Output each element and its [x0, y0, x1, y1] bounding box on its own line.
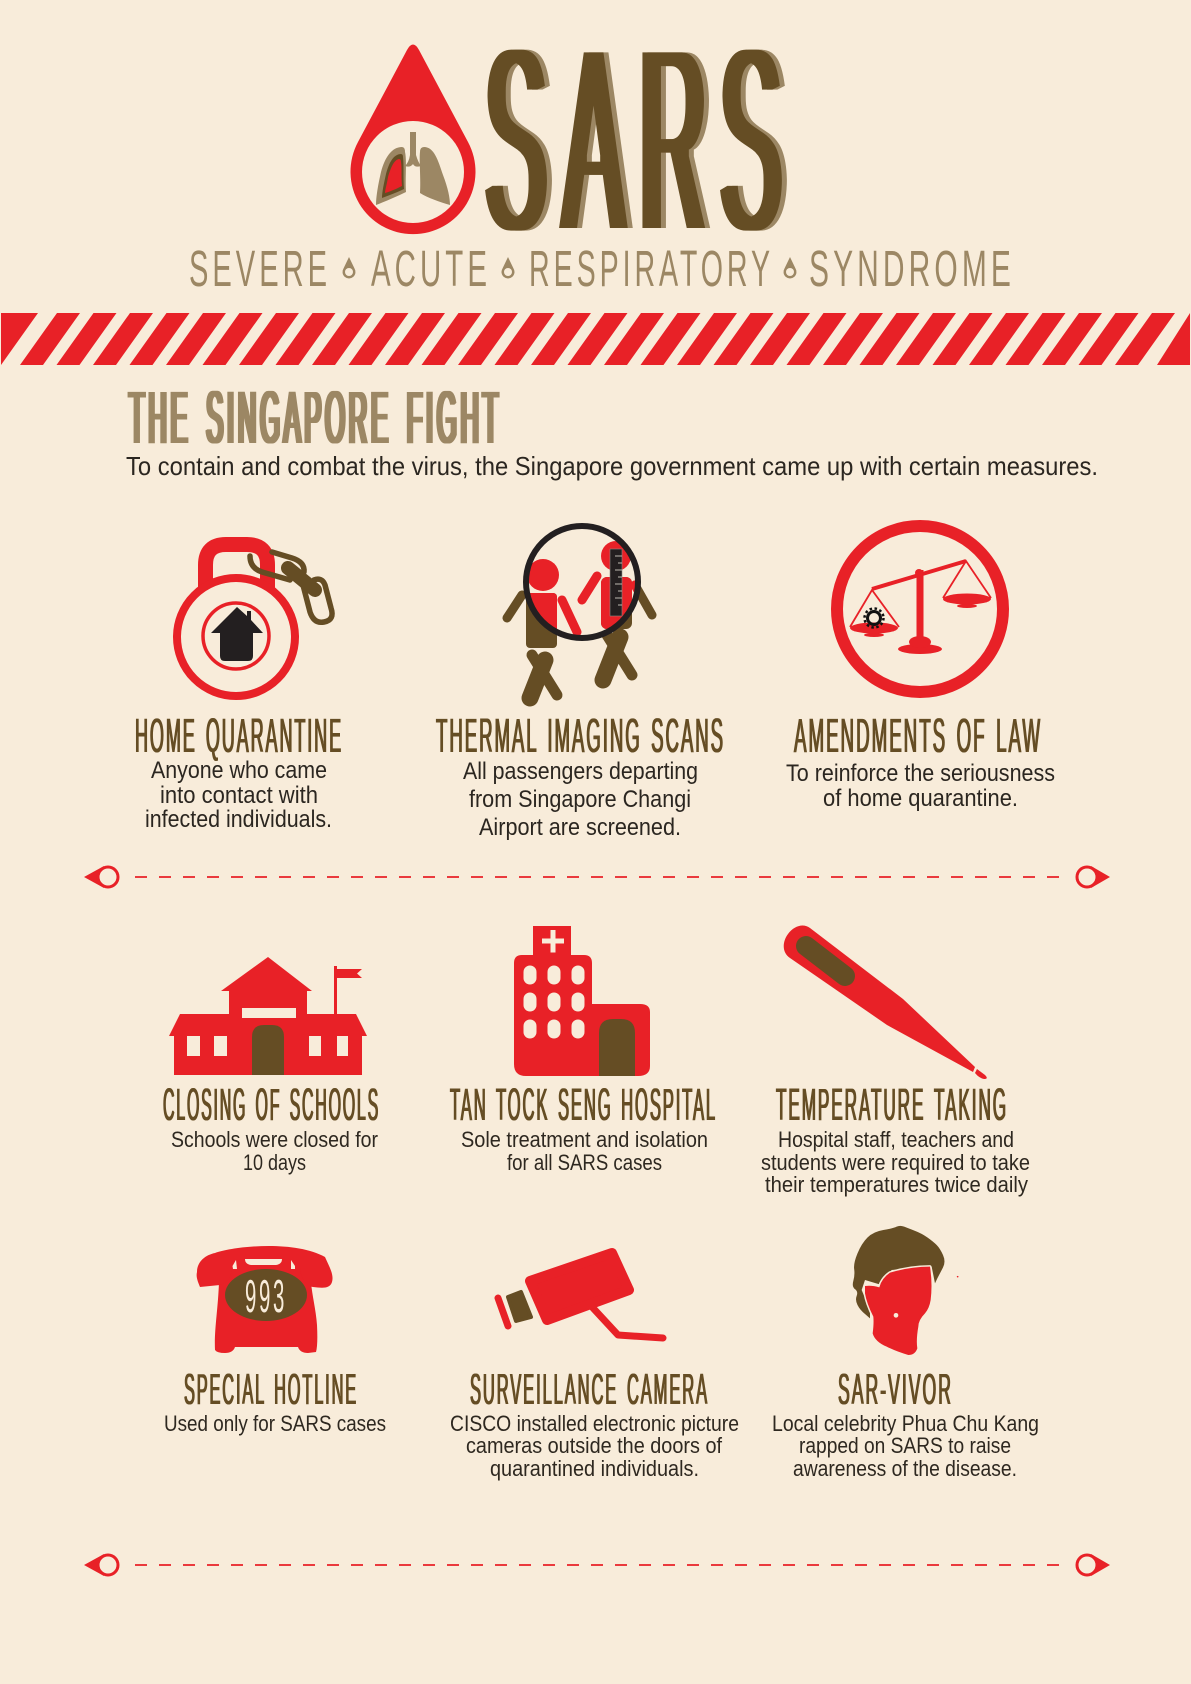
description: into contact with	[160, 782, 318, 809]
panel: special hotline	[164, 1246, 386, 1436]
infographic: CLOSING OF SCHOOLS	[163, 1079, 380, 1130]
description	[450, 1411, 739, 1481]
description: To reinforce the seriousness	[786, 760, 1055, 787]
description: students were required to take	[761, 1150, 1030, 1175]
description: Airport are screened.	[479, 814, 681, 841]
panel: sar-vivor: SAR-VIVOR	[838, 1365, 953, 1414]
icon: thermometer	[784, 926, 987, 1079]
panel: sar-vivor	[772, 1226, 1039, 1481]
subtitle: severe acute respiratory syndrome: RESPIRATORY	[529, 240, 774, 297]
divider arrow line 2	[84, 1554, 1110, 1576]
description: from Singapore Changi	[469, 786, 691, 813]
description: for all SARS cases	[507, 1150, 662, 1175]
subtitle: severe acute respiratory syndrome: ACUTE	[371, 240, 491, 297]
description: their temperatures twice daily	[765, 1172, 1028, 1197]
description: awareness of the disease.	[793, 1456, 1017, 1481]
description: cameras outside the doors of	[466, 1433, 723, 1458]
infographic: TAN TOCK SENG HOSPITAL	[450, 1079, 717, 1130]
panel: closing of schools	[163, 957, 380, 1175]
description: 10 days	[243, 1150, 306, 1175]
icon: telephone with 993: 993	[245, 1270, 287, 1322]
description: Anyone who came	[151, 757, 327, 784]
title: SARS: SARS	[485, 0, 781, 287]
description	[461, 1127, 708, 1175]
description: infected individuals.	[145, 806, 332, 833]
icon: scales of justice in a circle	[837, 526, 1003, 692]
icon: hospital building	[514, 926, 650, 1076]
divider arrow line 1	[84, 866, 1110, 888]
infographic: SPECIAL HOTLINE	[184, 1365, 358, 1414]
description	[786, 760, 1055, 812]
description	[772, 1411, 1039, 1481]
panel: tan tock seng hospital	[450, 926, 717, 1175]
icon: padlock with house and chain	[177, 544, 332, 696]
section intro text: To contain and combat the virus, the Singapore government came up with certain measures.	[126, 451, 1098, 481]
infographic: HOME QUARANTINE	[135, 710, 343, 763]
icon: blood drop with lungs	[351, 44, 476, 234]
icon: school building	[169, 957, 367, 1075]
description	[761, 1127, 1030, 1197]
description: Schools were closed for	[171, 1127, 378, 1152]
subtitle: severe acute respiratory syndrome: SEVERE	[189, 240, 331, 297]
infographic: THE SINGAPORE FIGHT	[129, 376, 502, 459]
panel: amendments of law	[786, 526, 1055, 812]
panel: thermal imaging scans	[436, 526, 725, 841]
infographic: THERMAL IMAGING SCANS	[436, 710, 725, 763]
description: quarantined individuals.	[490, 1456, 699, 1481]
icon: two walkers under a magnifier	[507, 526, 652, 698]
description: All passengers departing	[463, 758, 698, 785]
description: Local celebrity Phua Chu Kang	[772, 1411, 1039, 1436]
icon: CCTV camera	[498, 1253, 663, 1338]
description: CISCO installed electronic picture	[450, 1411, 739, 1436]
description: Sole treatment and isolation	[461, 1127, 708, 1152]
description	[463, 758, 698, 841]
infographic: SURVEILLANCE CAMERA	[470, 1365, 709, 1414]
subtitle: severe acute respiratory syndrome: SYNDROME	[809, 240, 1015, 297]
panel: surveillance camera	[450, 1253, 739, 1481]
description	[171, 1127, 378, 1175]
description: Used only for SARS cases	[164, 1411, 386, 1436]
description: rapped on SARS to raise	[799, 1433, 1011, 1458]
hazard stripe band	[1, 313, 1190, 365]
icon: telephone with 993	[197, 1246, 333, 1353]
description: of home quarantine.	[823, 785, 1018, 812]
description: Hospital staff, teachers and	[778, 1127, 1014, 1152]
description	[145, 757, 332, 833]
panel: home quarantine	[135, 544, 343, 833]
header: logo and title	[189, 0, 1015, 297]
icon: head silhouette	[853, 1226, 958, 1355]
subtitle: severe acute respiratory syndrome	[189, 240, 1015, 297]
panel: temperature taking	[761, 926, 1030, 1197]
